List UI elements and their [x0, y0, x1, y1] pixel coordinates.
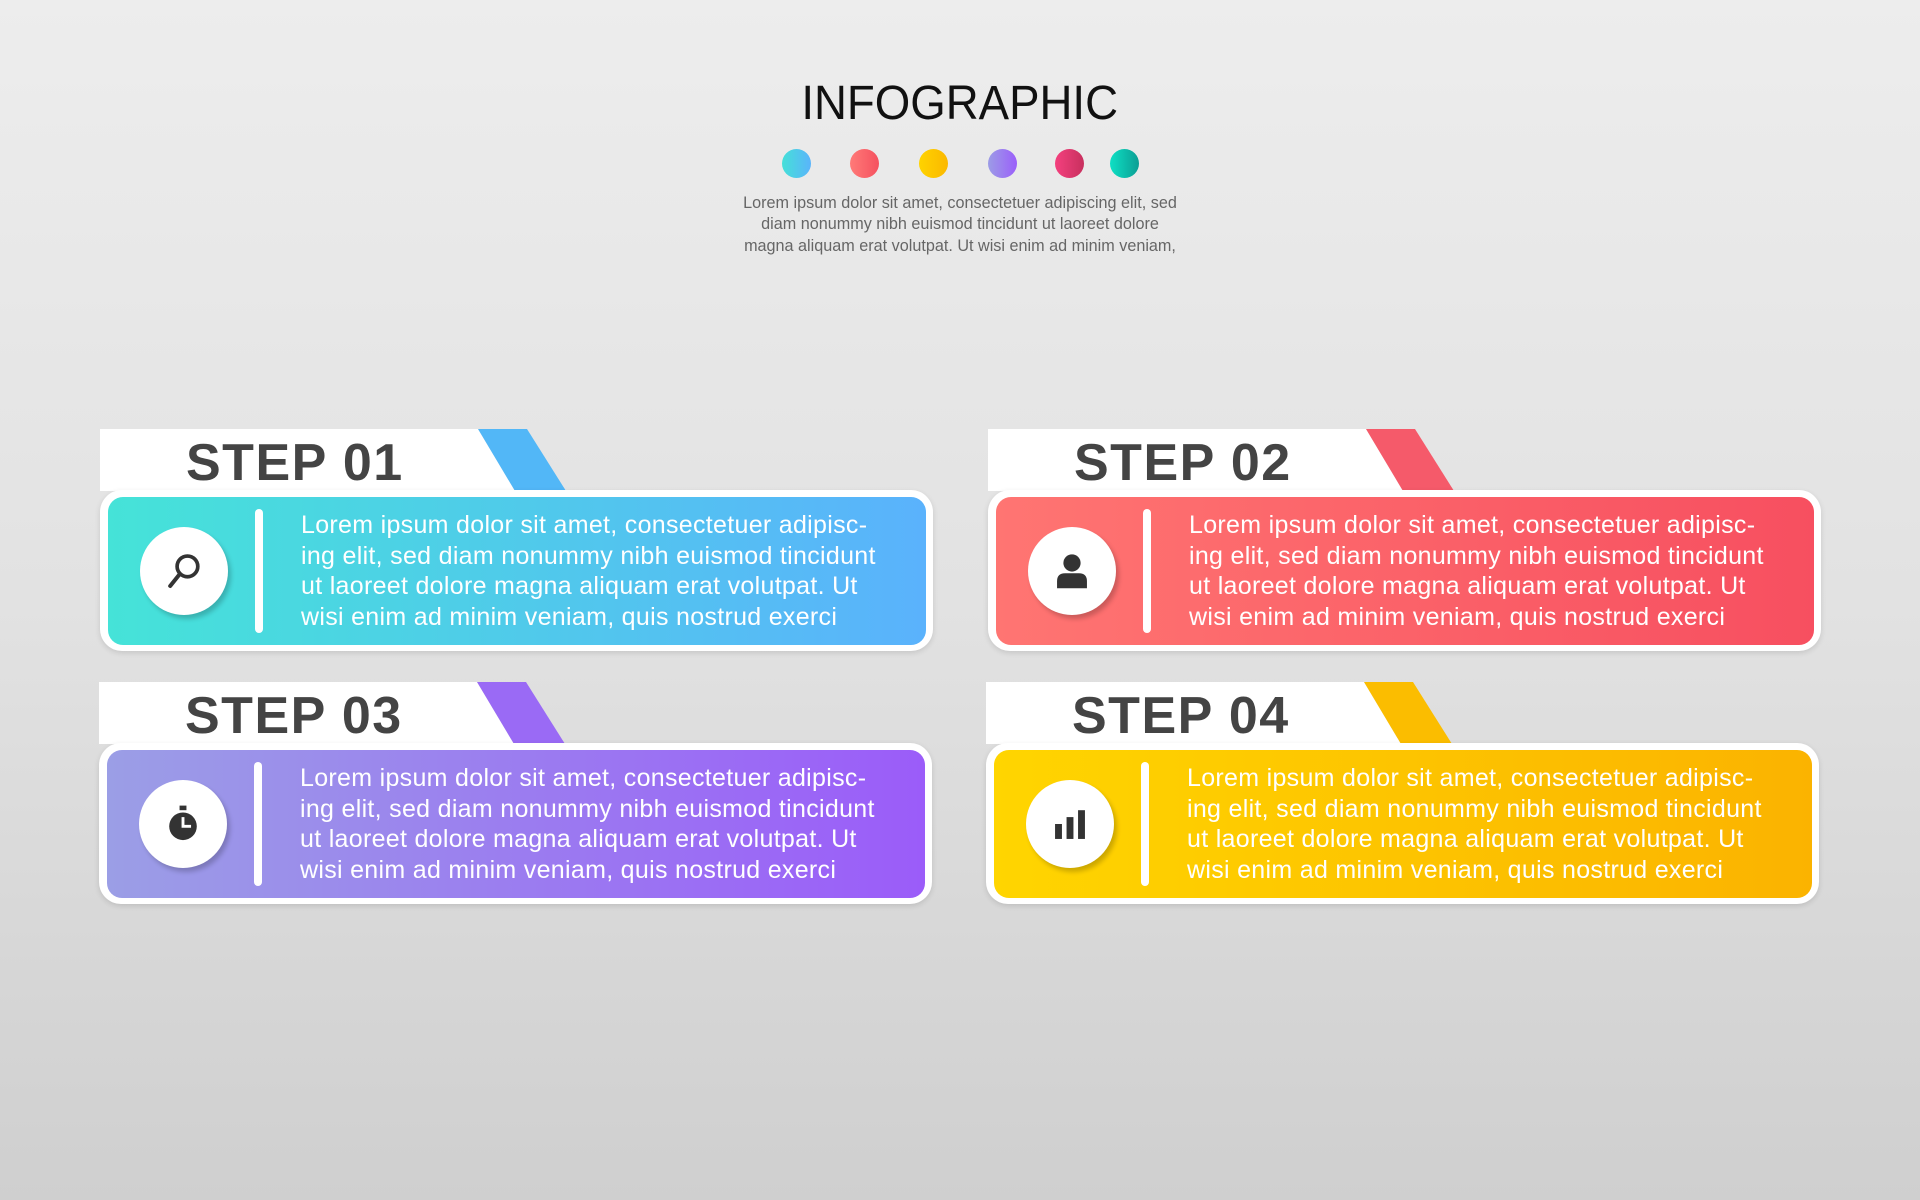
- title: INFOGRAPHIC: [802, 77, 1118, 130]
- text: step 02: [1189, 511, 1764, 631]
- heading: step 01: STEP 01: [186, 434, 404, 492]
- text: step 01: ut laoreet dolore magna aliquam erat volutpat. Ut: [301, 572, 858, 600]
- text: step 03: [300, 764, 875, 884]
- icon: person: [1028, 527, 1116, 615]
- panel: step 04: [984, 682, 1820, 908]
- icon: magnifier: [140, 527, 228, 615]
- text: step 02: ing elit, sed diam nonummy nibh euismod tincidunt: [1189, 542, 1764, 570]
- text: step 04: wisi enim ad minim veniam, quis nostrud exerci: [1187, 856, 1723, 884]
- heading: step 02: STEP 02: [1074, 434, 1292, 492]
- text: step 01: [301, 511, 876, 631]
- text: step 03: Lorem ipsum dolor sit amet, consectetuer adipisc-: [300, 764, 866, 792]
- panel: step 01: [98, 429, 934, 654]
- panel: step 02: [986, 429, 1822, 654]
- description: Lorem ipsum dolor sit amet, consectetuer adipiscing elit, sed: [743, 194, 1177, 212]
- heading: step 03: STEP 03: [185, 687, 403, 745]
- text: step 03: ut laoreet dolore magna aliquam erat volutpat. Ut: [300, 825, 857, 853]
- text: step 02: Lorem ipsum dolor sit amet, consectetuer adipisc-: [1189, 511, 1755, 539]
- description: magna aliquam erat volutpat. Ut wisi enim ad minim veniam,: [744, 237, 1176, 255]
- heading: step 04: STEP 04: [1072, 687, 1290, 745]
- panel: step 03: [98, 682, 934, 908]
- text: step 01: wisi enim ad minim veniam, quis nostrud exerci: [301, 603, 837, 631]
- text: step 01: Lorem ipsum dolor sit amet, consectetuer adipisc-: [301, 511, 867, 539]
- text: step 04: [1187, 764, 1762, 884]
- icon: bar chart: [1026, 780, 1114, 868]
- text: step 04: ut laoreet dolore magna aliquam erat volutpat. Ut: [1187, 825, 1744, 853]
- text: step 03: ing elit, sed diam nonummy nibh euismod tincidunt: [300, 795, 875, 823]
- text: step 04: ing elit, sed diam nonummy nibh euismod tincidunt: [1187, 795, 1762, 823]
- description: diam nonummy nibh euismod tincidunt ut laoreet dolore: [761, 215, 1159, 233]
- icon: stopwatch: [139, 780, 227, 868]
- text: step 02: wisi enim ad minim veniam, quis nostrud exerci: [1189, 603, 1725, 631]
- text: step 02: ut laoreet dolore magna aliquam erat volutpat. Ut: [1189, 572, 1746, 600]
- text: step 04: Lorem ipsum dolor sit amet, consectetuer adipisc-: [1187, 764, 1753, 792]
- color dots: [782, 149, 1139, 178]
- text: step 01: ing elit, sed diam nonummy nibh euismod tincidunt: [301, 542, 876, 570]
- text: step 03: wisi enim ad minim veniam, quis nostrud exerci: [300, 856, 836, 884]
- description: [743, 194, 1177, 255]
